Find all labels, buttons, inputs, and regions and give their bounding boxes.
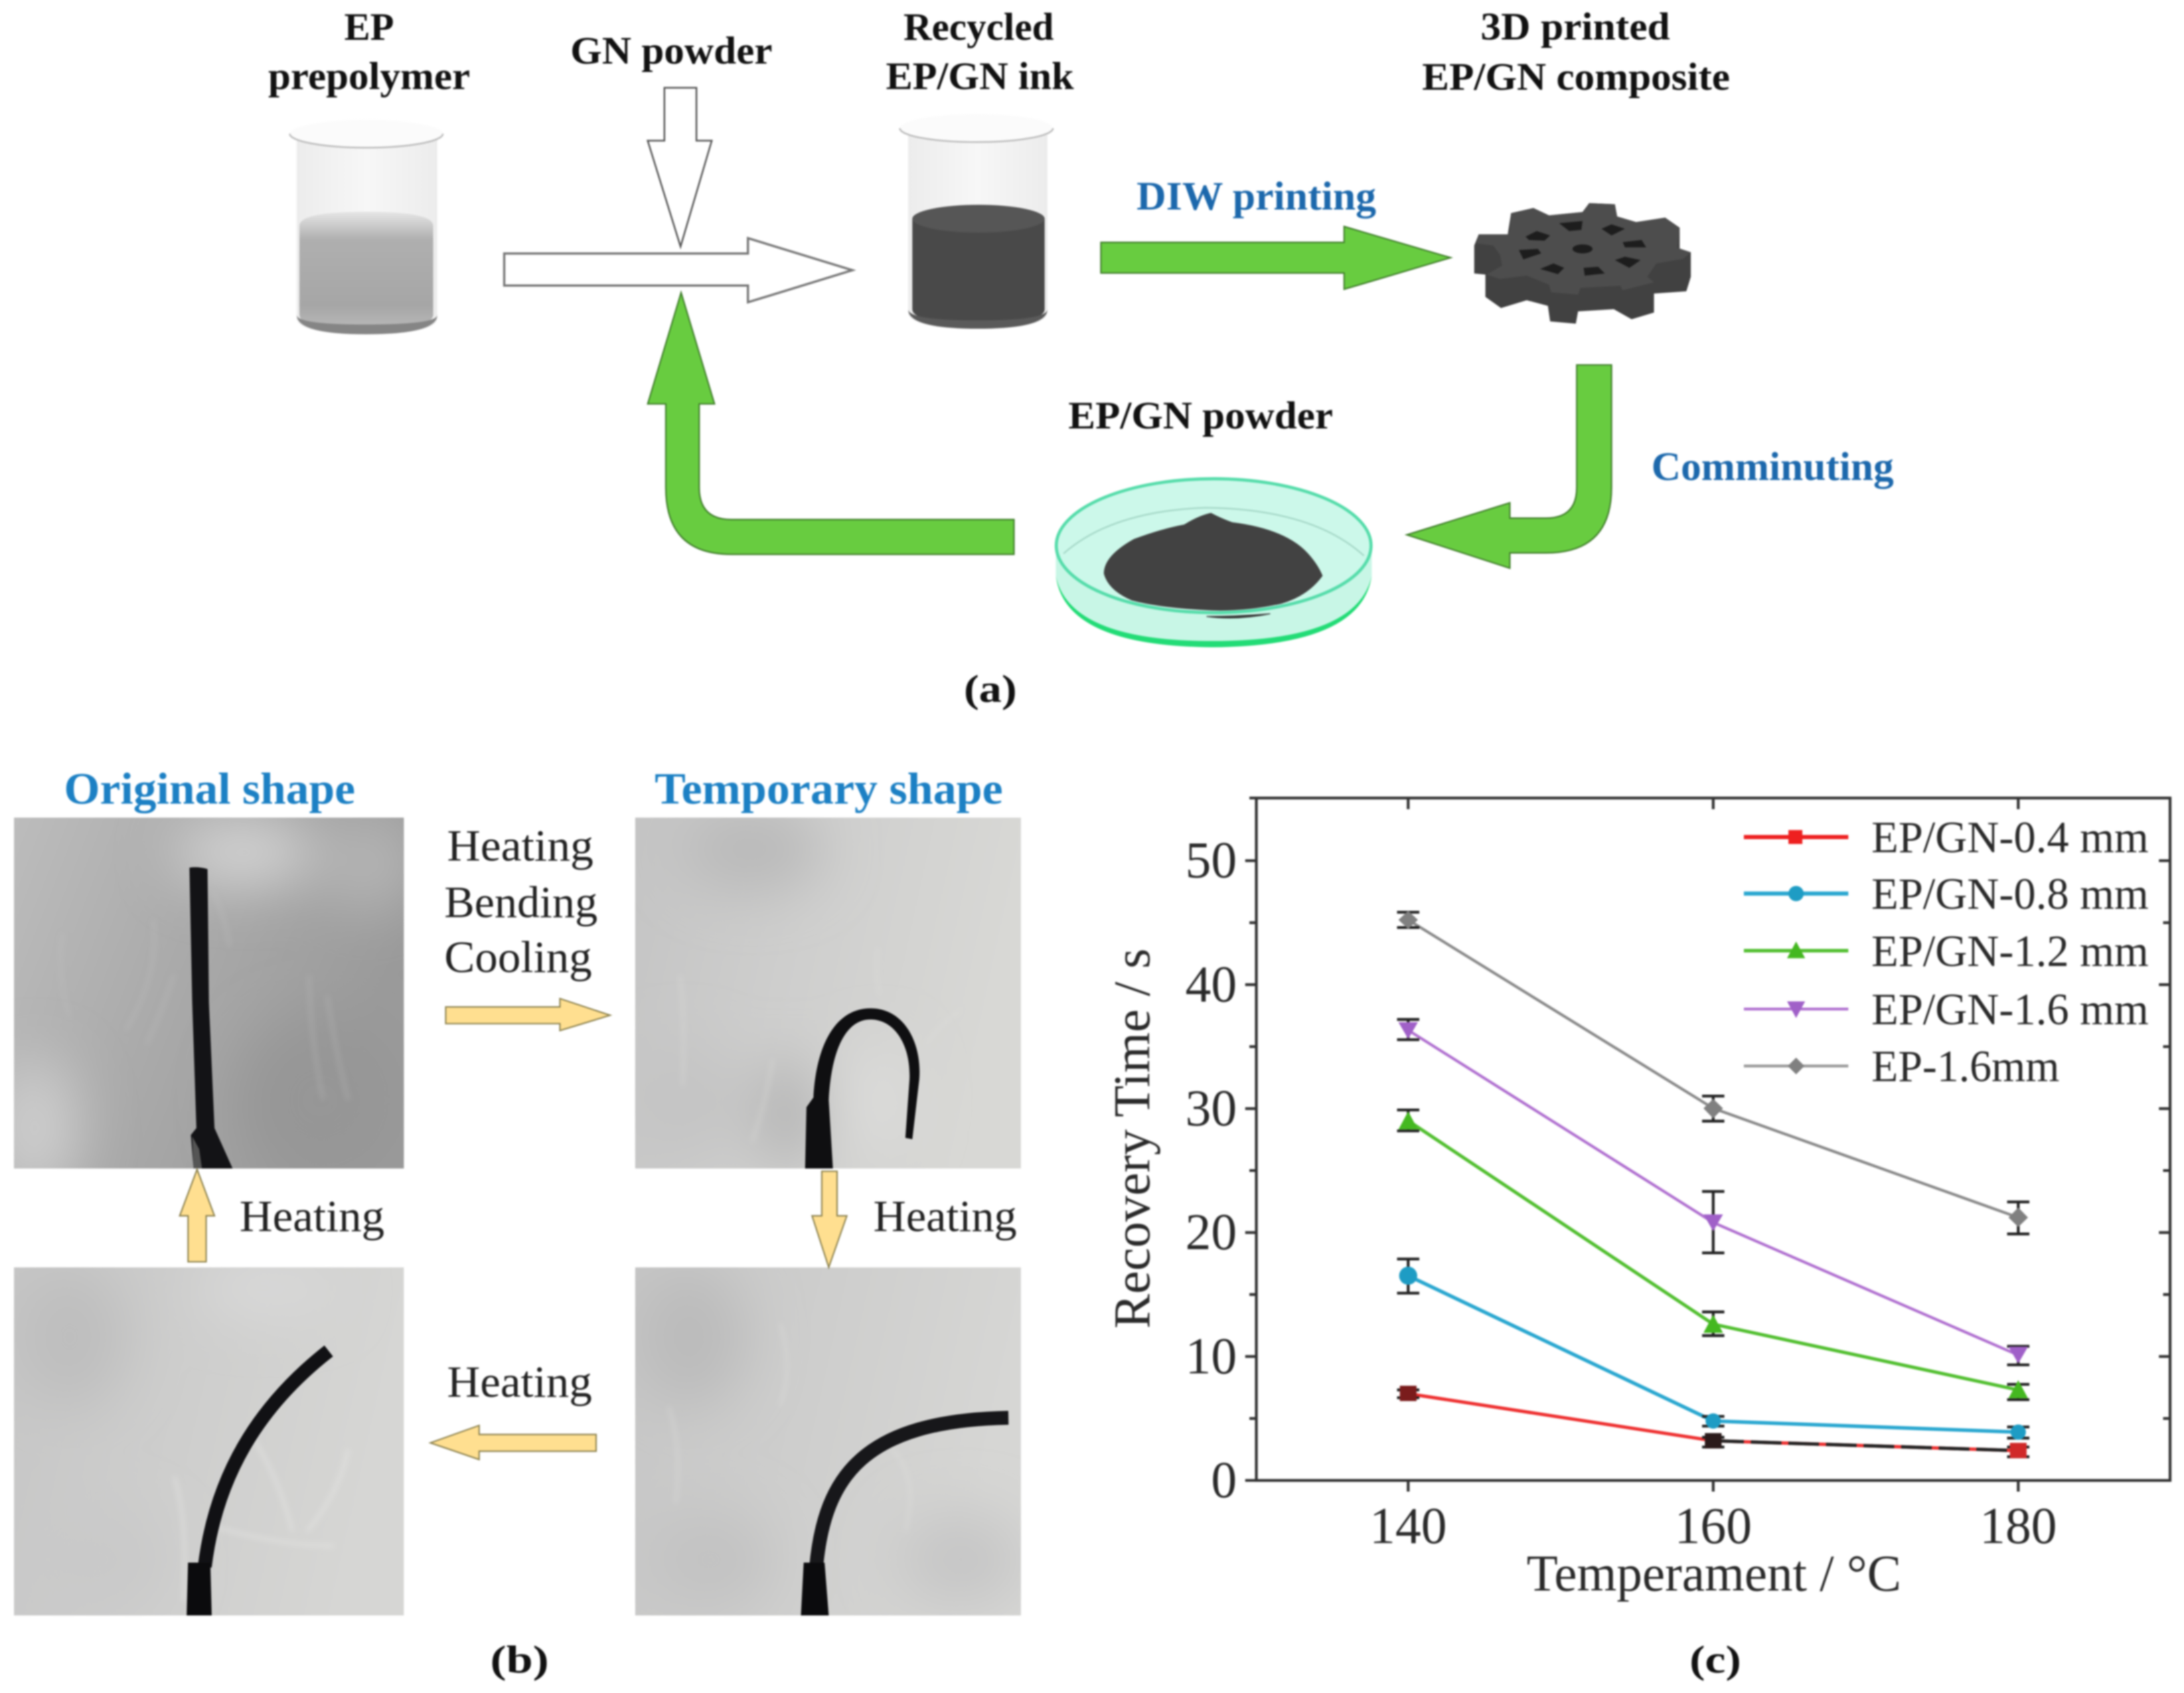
- arrow: yellow arrow left: [431, 1425, 596, 1459]
- y-axis title: Recovery Time / s: [1103, 949, 1160, 1329]
- x-axis tick labels: 140: [1370, 1497, 1447, 1554]
- legend item: EP/GN-0.8 mm: EP/GN-0.8 mm: [1871, 870, 2149, 919]
- x-axis tick labels: 180: [1980, 1497, 2057, 1554]
- label: (b): (b): [490, 1638, 549, 1682]
- y-axis tick labels: [1185, 831, 1237, 1508]
- x-axis title: Temperament / °C: [1527, 1544, 1901, 1602]
- y-axis tick labels: 50: [1185, 831, 1237, 889]
- panel: shape memory photos (b): [0, 764, 1024, 1682]
- label: (c): (c): [1689, 1638, 1741, 1682]
- icon: beaker with recycled EP/GN ink: [900, 114, 1053, 329]
- arrow: white arrow from EP prepolymer to ink: [504, 238, 852, 302]
- series: EP/GN-0.4 mm: [1397, 1386, 2029, 1458]
- x-axis tick labels: 160: [1674, 1497, 1752, 1554]
- label: Heating, left: Heating: [240, 1192, 384, 1241]
- heading: Temporary shape: Temporary shape: [655, 764, 1003, 813]
- arrow: green DIW printing arrow: [1101, 226, 1451, 289]
- series: EP/GN-1.6 mm: [1397, 1020, 2029, 1365]
- photo: partially recovered strip, right: [634, 1267, 1024, 1615]
- legend item: EP/GN-1.6 mm: [1744, 985, 2149, 1034]
- icon: 3D printed gear composite: [1474, 203, 1691, 323]
- label: (a): (a): [964, 667, 1017, 711]
- photo: original straight strip: [13, 817, 405, 1170]
- x-axis tick labels: [1370, 1497, 2057, 1554]
- label: Recycled EP/GN ink: EP/GN ink: [886, 54, 1075, 98]
- legend item: EP/GN-0.4 mm: [1744, 813, 2149, 862]
- heading: Original shape: Original shape: [64, 764, 355, 813]
- arrow: green recycling arrow back to mixing: [647, 293, 1014, 554]
- legend item: EP-1.6mm: EP-1.6mm: [1871, 1042, 2059, 1091]
- label: EP prepolymer: EP: [344, 5, 394, 48]
- legend item: EP/GN-0.8 mm: [1744, 870, 2149, 919]
- legend item: EP-1.6mm: [1744, 1042, 2059, 1091]
- chart: recovery time vs temperature (c): [1103, 798, 2170, 1682]
- legend item: EP/GN-1.6 mm: EP/GN-1.6 mm: [1871, 985, 2149, 1034]
- label: EP prepolymer: prepolymer: [268, 54, 470, 98]
- label: EP/GN powder: EP/GN powder: [1069, 394, 1333, 437]
- photo: partially recovered strip, left: [14, 1263, 404, 1615]
- label: Heating, bottom: Heating: [447, 1358, 592, 1407]
- icon: petri dish with EP/GN powder: [1056, 479, 1372, 647]
- label: Comminuting: Comminuting: [1651, 445, 1893, 489]
- label: GN powder: GN powder: [570, 29, 773, 72]
- legend item: EP/GN-1.2 mm: EP/GN-1.2 mm: [1871, 927, 2149, 976]
- label: DIW printing: DIW printing: [1137, 174, 1376, 219]
- legend item: EP/GN-0.4 mm: EP/GN-0.4 mm: [1871, 813, 2149, 862]
- arrow: yellow arrow to temporary shape: [446, 999, 610, 1031]
- label: Heating, right: Heating: [873, 1192, 1017, 1241]
- legend item: EP/GN-1.2 mm: [1744, 927, 2149, 976]
- panel: recycling process (a): [268, 5, 1893, 711]
- y-axis tick labels: 0: [1211, 1451, 1237, 1508]
- label: Heating Bending Cooling: Bending: [445, 878, 597, 927]
- arrow: yellow arrow up: [179, 1170, 214, 1262]
- series: EP/GN-0.8 mm: [1397, 1259, 2029, 1440]
- y-axis tick labels: 20: [1185, 1203, 1237, 1261]
- series: EP/GN-1.2 mm: [1397, 1110, 2029, 1400]
- label: 3D printed EP/GN composite: 3D printed: [1480, 5, 1670, 48]
- label: 3D printed EP/GN composite: EP/GN composite: [1422, 55, 1730, 98]
- y-axis tick labels: 10: [1185, 1327, 1237, 1384]
- arrow: white arrow down from GN powder: [647, 88, 712, 246]
- chart axes and ticks: [1245, 798, 2170, 1492]
- arrow: yellow arrow down: [812, 1172, 847, 1267]
- y-axis tick labels: 30: [1185, 1079, 1237, 1137]
- label: Recycled EP/GN ink: Recycled: [903, 5, 1054, 48]
- label: Heating Bending Cooling: Heating: [447, 822, 593, 871]
- label: Heating Bending Cooling: Cooling: [445, 933, 592, 982]
- photo: temporary hook shape: [627, 808, 1021, 1170]
- icon: beaker with EP prepolymer: [290, 120, 443, 334]
- legend: [1744, 813, 2149, 1091]
- series: EP-1.6mm: [1397, 911, 2029, 1234]
- y-axis tick labels: 40: [1185, 955, 1237, 1013]
- arrow: green comminuting bent arrow: [1407, 365, 1612, 568]
